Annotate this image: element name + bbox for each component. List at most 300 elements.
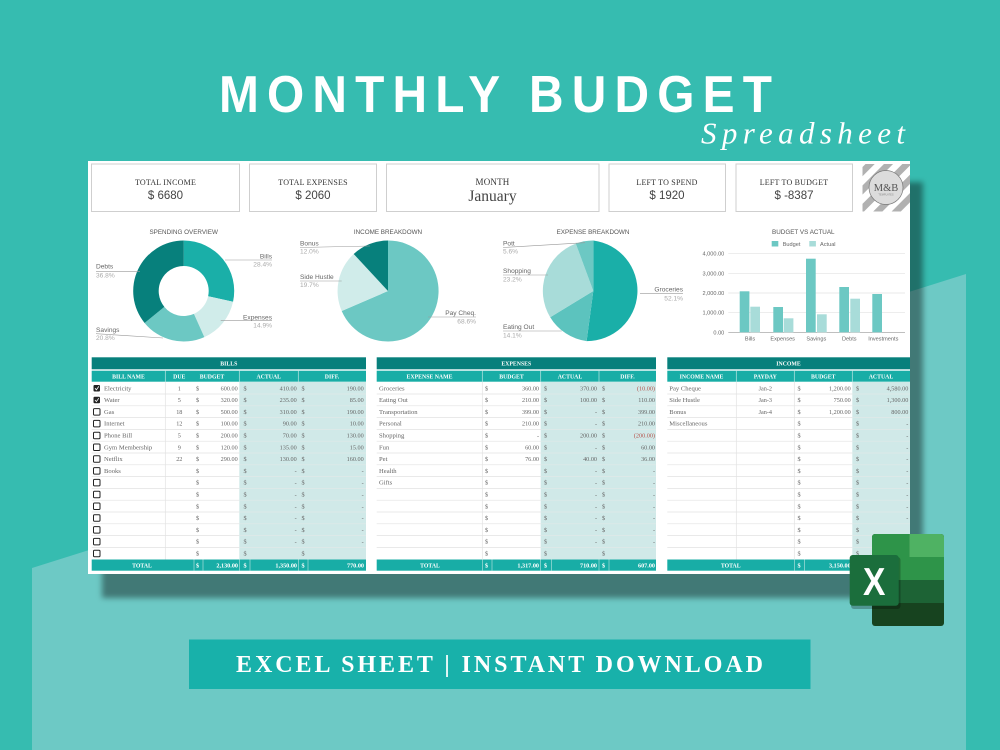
chart: expense breakdown pie: 14.1% — [503, 332, 522, 340]
bills rows: 85.00 — [350, 397, 364, 404]
income rows: $ — [798, 492, 801, 498]
expenses rows: $ — [602, 539, 605, 546]
panel: dashboard sheet — [88, 161, 910, 574]
expenses rows: Shopping — [379, 432, 405, 440]
expenses rows: - — [653, 527, 655, 534]
bills rows: 1 — [178, 385, 181, 392]
bills total row: 2,130.00 — [216, 562, 238, 570]
bills rows: 5 — [178, 397, 181, 404]
income rows: $ — [856, 421, 859, 428]
bills rows: - — [295, 492, 297, 498]
income rows: $ — [856, 456, 859, 463]
bills rows: 190.00 — [347, 385, 364, 392]
bills rows: Gym Membership — [104, 444, 153, 451]
expenses rows: $ — [602, 385, 605, 392]
expenses rows: $ — [485, 550, 488, 558]
bills rows: $ — [244, 397, 247, 404]
chart: budget vs actual bars: Debts — [842, 336, 857, 342]
expenses rows: Transportation — [379, 409, 418, 416]
bills rows: Phone Bill — [104, 432, 132, 440]
income rows: $ — [856, 480, 859, 487]
income rows: 1,300.00 — [887, 397, 908, 404]
expenses rows: $ — [602, 409, 605, 416]
bills rows: 5 — [178, 432, 181, 440]
chart: spending overview donut: 20.8% — [96, 335, 115, 342]
income rows: $ — [798, 503, 801, 510]
income total row: 3,150.00 — [829, 562, 851, 570]
expenses rows: Eating Out — [379, 397, 408, 404]
expenses rows: - — [595, 480, 597, 487]
chart: budget vs actual bars: 2,000.00 — [703, 291, 724, 297]
bills rows: Books — [104, 468, 121, 475]
chart: expense breakdown pie: Groceries — [654, 286, 684, 294]
table: bills — [92, 357, 366, 571]
bills rows: - — [295, 503, 297, 510]
income rows: $ — [798, 539, 801, 546]
income rows: $ — [798, 385, 801, 392]
expenses total row: $ — [544, 562, 547, 570]
bills rows: $ — [196, 468, 199, 475]
chart: income breakdown pie: Side Hustle — [300, 274, 334, 281]
chart: spending overview donut: Bills — [260, 254, 273, 260]
bills rows: $ — [244, 385, 247, 392]
income header: INCOME NAME — [680, 374, 723, 380]
expenses title bar: EXPENSES — [501, 362, 531, 368]
bills rows: $ — [196, 432, 199, 440]
chart: expense breakdown pie: 23.2% — [503, 276, 522, 284]
expenses rows: 76.00 — [525, 456, 539, 463]
income total row: $ — [798, 562, 801, 570]
expenses total row: 1,317.00 — [517, 562, 539, 570]
expenses rows: $ — [485, 421, 488, 428]
expenses rows: $ — [544, 468, 547, 475]
income total row — [667, 560, 910, 571]
bills title bar — [92, 357, 366, 369]
expenses rows: $ — [485, 539, 488, 546]
chart: budget vs actual bars: BUDGET VS ACTUAL — [772, 229, 835, 236]
bills rows: $ — [244, 456, 247, 463]
chart: budget vs actual bars: 3,000.00 — [703, 271, 724, 277]
chart: spending overview donut — [96, 229, 273, 342]
bills rows: Water — [104, 397, 120, 404]
expenses rows: - — [653, 539, 655, 546]
bills rows: $ — [302, 409, 305, 416]
expenses rows: Personal — [379, 421, 402, 428]
expenses rows: $ — [602, 480, 605, 487]
expenses rows: $ — [602, 468, 605, 475]
logo: TEMPLATES — [878, 192, 894, 196]
legend — [772, 241, 836, 248]
income header: BUDGET — [811, 374, 836, 380]
income rows: - — [906, 492, 908, 498]
legend: Budget — [783, 242, 801, 248]
expenses rows: $ — [602, 492, 605, 498]
bills rows: $ — [244, 527, 247, 534]
income rows: $ — [798, 409, 801, 416]
expenses header: BUDGET — [499, 374, 524, 380]
income rows: $ — [856, 503, 859, 510]
bills rows: $ — [302, 515, 305, 522]
income rows: - — [906, 515, 908, 522]
bills rows: $ — [196, 421, 199, 428]
bills rows: 120.00 — [221, 444, 238, 451]
bills rows: $ — [244, 409, 247, 416]
expenses rows: $ — [485, 515, 488, 522]
expenses rows: $ — [544, 539, 547, 546]
KPI: left to budget — [736, 164, 852, 212]
income header: PAYDAY — [754, 374, 778, 380]
bills total row: TOTAL — [132, 564, 152, 570]
income rows: $ — [798, 515, 801, 522]
expenses rows: Fun — [379, 444, 390, 451]
expenses rows: 60.00 — [641, 444, 655, 451]
bills rows: 12 — [176, 421, 182, 428]
expenses rows: $ — [485, 432, 488, 440]
expenses rows: $ — [544, 515, 547, 522]
bills total row: $ — [302, 562, 305, 570]
bills rows: 200.00 — [221, 432, 238, 440]
expenses rows: - — [653, 515, 655, 522]
bills rows: Gas — [104, 409, 115, 416]
chart: spending overview donut: Expenses — [243, 314, 273, 322]
expenses rows: - — [653, 468, 655, 475]
chart: budget vs actual bars: 1,000.00 — [703, 311, 724, 317]
KPI: left to budget: $ -8387 — [774, 190, 814, 202]
expenses rows: 100.00 — [580, 397, 597, 404]
expenses rows: - — [595, 492, 597, 498]
KPI: left to budget: LEFT TO BUDGET — [760, 178, 828, 187]
bills rows: $ — [244, 480, 247, 487]
chart: expense breakdown pie: Pott — [503, 240, 515, 248]
expenses rows: (200.00) — [634, 432, 655, 440]
chart: spending overview donut: Debts — [96, 264, 114, 270]
bills rows: - — [362, 468, 364, 475]
expenses rows: (10.00) — [637, 385, 655, 392]
bills header: ACTUAL — [257, 374, 281, 380]
expenses rows: $ — [602, 432, 605, 440]
income rows: 1,200.00 — [829, 409, 851, 416]
expenses rows: $ — [544, 480, 547, 487]
bills rows: $ — [196, 385, 199, 392]
bills rows: 9 — [178, 444, 181, 451]
expenses rows: - — [595, 468, 597, 475]
expenses rows: $ — [602, 515, 605, 522]
table: income — [667, 357, 910, 571]
expenses rows: $ — [544, 432, 547, 440]
expenses rows: Health — [379, 468, 397, 475]
income rows: $ — [798, 550, 801, 558]
chart: income breakdown pie: INCOME BREAKDOWN — [354, 229, 423, 236]
expenses rows: 60.00 — [525, 444, 539, 451]
expenses rows: 200.00 — [580, 432, 597, 440]
KPI: total expenses: $ 2060 — [295, 190, 331, 202]
bills rows: 18 — [176, 409, 182, 416]
income rows: $ — [798, 421, 801, 428]
bills rows: $ — [196, 527, 199, 534]
chart: income breakdown pie — [300, 229, 476, 341]
expenses rows: $ — [485, 409, 488, 416]
bills total row: 1,350.00 — [275, 562, 297, 570]
chart: budget vs actual bars: Bills — [745, 336, 755, 342]
bills rows: $ — [196, 539, 199, 546]
expenses rows: Pet — [379, 456, 388, 463]
bills rows: $ — [196, 503, 199, 510]
income rows: - — [906, 468, 908, 475]
bills rows: - — [362, 503, 364, 510]
income rows: Side Hustle — [669, 397, 700, 404]
expenses rows: - — [653, 480, 655, 487]
bills rows: $ — [302, 456, 305, 463]
bills rows: 410.00 — [280, 385, 297, 392]
income rows: $ — [798, 527, 801, 534]
income rows: Jan-4 — [759, 409, 772, 416]
bills rows: $ — [244, 550, 247, 558]
chart: spending overview donut: SPENDING OVERVIEW — [149, 229, 218, 236]
bills rows: 310.00 — [280, 409, 297, 416]
expenses rows: 36.00 — [641, 456, 655, 463]
chart: expense breakdown pie: Shopping — [503, 268, 531, 275]
income rows: $ — [798, 456, 801, 463]
income rows: $ — [798, 432, 801, 440]
income rows: - — [906, 421, 908, 428]
expenses total row: 710.00 — [580, 562, 597, 570]
table: expenses — [377, 357, 656, 571]
expenses rows: $ — [544, 444, 547, 451]
expenses rows: 210.00 — [522, 421, 539, 428]
bills rows: $ — [244, 432, 247, 440]
expenses rows: $ — [602, 456, 605, 463]
bills rows: $ — [196, 550, 199, 558]
logo — [862, 164, 910, 212]
income rows: - — [906, 444, 908, 451]
income rows: $ — [856, 444, 859, 451]
expenses rows: 370.00 — [580, 385, 597, 392]
chart: income breakdown pie: 12.0% — [300, 248, 319, 256]
bills rows: - — [295, 480, 297, 487]
bills rows: 320.00 — [221, 397, 238, 404]
bills rows: $ — [244, 539, 247, 546]
bills rows: - — [362, 515, 364, 522]
expenses rows: - — [595, 515, 597, 522]
KPI: month: January — [468, 188, 517, 205]
income rows: 750.00 — [834, 397, 851, 404]
income title bar — [667, 357, 910, 369]
chart: expense breakdown pie — [503, 229, 684, 341]
income rows: Jan-2 — [759, 385, 772, 392]
expenses rows — [379, 385, 655, 558]
bills rows: 135.00 — [280, 444, 297, 451]
bills rows: $ — [302, 492, 305, 498]
expenses header — [377, 371, 656, 382]
expenses total row: TOTAL — [420, 564, 440, 570]
bills rows: $ — [302, 503, 305, 510]
dashboard shadow — [102, 182, 923, 598]
bills rows: 290.00 — [221, 456, 238, 463]
expenses rows: $ — [485, 385, 488, 392]
background light panel — [32, 274, 966, 750]
income rows: $ — [856, 409, 859, 416]
chart: spending overview donut: 14.9% — [253, 322, 272, 330]
bills rows: $ — [302, 539, 305, 546]
bills rows — [104, 385, 364, 558]
bills rows: - — [362, 539, 364, 546]
logo: M&B — [874, 183, 898, 194]
KPI: month: MONTH — [476, 177, 510, 187]
bills rows: - — [295, 515, 297, 522]
bills rows: $ — [302, 480, 305, 487]
income rows: $ — [798, 444, 801, 451]
bills rows: $ — [196, 456, 199, 463]
income rows: $ — [856, 432, 859, 440]
chart: budget vs actual bars: 4,000.00 — [703, 252, 724, 258]
bills total row: 770.00 — [347, 562, 364, 570]
expenses rows: $ — [602, 503, 605, 510]
chart: income breakdown pie: 68.6% — [457, 318, 476, 326]
bills rows: Internet — [104, 421, 125, 428]
bills rows: - — [295, 539, 297, 546]
bills rows: 160.00 — [347, 456, 364, 463]
KPI: total income — [92, 164, 240, 212]
bills rows: - — [295, 527, 297, 534]
expenses rows: 110.00 — [638, 397, 655, 404]
expenses rows: $ — [544, 421, 547, 428]
bills rows: $ — [302, 550, 305, 558]
bills rows: $ — [196, 492, 199, 498]
income rows: $ — [798, 468, 801, 475]
bills header: DUE — [173, 374, 186, 380]
income rows: - — [906, 432, 908, 440]
bills rows: $ — [302, 432, 305, 440]
expenses rows: Groceries — [379, 385, 405, 392]
chart: expense breakdown pie: Eating Out — [503, 324, 534, 331]
chart: budget vs actual bars — [703, 229, 905, 342]
expenses rows: $ — [602, 527, 605, 534]
income header: ACTUAL — [869, 374, 893, 380]
chart: income breakdown pie: Pay Cheq. — [445, 310, 476, 317]
expenses rows: 399.00 — [638, 409, 655, 416]
expenses rows: $ — [544, 456, 547, 463]
expenses total row: $ — [602, 562, 605, 570]
income rows — [669, 385, 908, 558]
chart: budget vs actual bars: Expenses — [770, 336, 795, 342]
income header — [667, 371, 910, 382]
expenses rows: $ — [485, 527, 488, 534]
income title bar: INCOME — [776, 362, 801, 368]
expenses rows: $ — [485, 492, 488, 498]
bills title bar: BILLS — [220, 362, 237, 368]
bills rows: $ — [196, 444, 199, 451]
bills rows: - — [362, 527, 364, 534]
expenses rows: $ — [544, 492, 547, 498]
bills rows: 235.00 — [280, 397, 297, 404]
expenses rows: 360.00 — [522, 385, 539, 392]
bills rows: - — [362, 492, 364, 498]
expenses rows: - — [595, 421, 597, 428]
bills checkboxes — [94, 385, 100, 557]
chart: spending overview donut: 36.8% — [96, 272, 115, 280]
bills rows: 130.00 — [280, 456, 297, 463]
expenses header: DIFF. — [620, 374, 635, 380]
bills total row — [92, 560, 366, 571]
income rows: Pay Cheque — [669, 385, 701, 392]
call to action banner: EXCEL SHEET | INSTANT DOWNLOAD — [236, 652, 763, 678]
expenses rows: $ — [544, 527, 547, 534]
income rows: $ — [856, 515, 859, 522]
bills rows: $ — [302, 421, 305, 428]
bills rows: $ — [244, 468, 247, 475]
KPI: left to spend — [609, 164, 726, 212]
legend: Actual — [820, 242, 836, 248]
bills rows: 10.00 — [350, 421, 364, 428]
bills rows: - — [295, 468, 297, 475]
title: MONTHLY BUDGET — [219, 65, 772, 123]
chart: budget vs actual bars: Investments — [868, 336, 899, 342]
KPI: total income: $ 6680 — [148, 190, 183, 202]
chart: income breakdown pie: 19.7% — [300, 282, 319, 289]
bills rows: $ — [196, 480, 199, 487]
bills rows: $ — [196, 515, 199, 522]
expenses rows: - — [595, 444, 597, 451]
call to action banner — [189, 640, 810, 689]
bills rows: $ — [302, 385, 305, 392]
bills rows: 22 — [176, 456, 182, 463]
expenses rows: 210.00 — [522, 397, 539, 404]
expenses rows: $ — [544, 397, 547, 404]
expenses rows: - — [595, 503, 597, 510]
bills rows: $ — [302, 468, 305, 475]
expenses rows: - — [653, 503, 655, 510]
expenses header: ACTUAL — [558, 374, 582, 380]
bills rows: 100.00 — [221, 421, 238, 428]
bills rows: Netflix — [104, 456, 123, 463]
bills rows: Electricity — [104, 385, 132, 392]
bills total row: $ — [244, 562, 247, 570]
expenses rows: $ — [602, 421, 605, 428]
expenses rows: $ — [602, 444, 605, 451]
income rows: 1,200.00 — [829, 385, 851, 392]
expenses rows: - — [653, 492, 655, 498]
bills rows: 130.00 — [347, 432, 364, 440]
icon: excel logo — [850, 534, 944, 626]
bills rows: 500.00 — [221, 409, 238, 416]
expenses total row — [377, 560, 656, 571]
income rows: $ — [856, 397, 859, 404]
bills rows: 600.00 — [221, 385, 238, 392]
bills rows: $ — [302, 527, 305, 534]
bills rows: $ — [244, 503, 247, 510]
KPI: month — [386, 164, 599, 212]
chart: spending overview donut: 28.4% — [253, 262, 272, 268]
expenses rows: Gifts — [379, 480, 393, 487]
chart: budget vs actual bars: 0.00 — [713, 330, 724, 336]
chart: spending overview donut: Savings — [96, 327, 120, 334]
icon: excel logo: X — [863, 560, 885, 604]
income rows: $ — [856, 385, 859, 392]
bills rows: $ — [302, 444, 305, 451]
bills rows: $ — [244, 515, 247, 522]
expenses rows: 399.00 — [522, 409, 539, 416]
expenses rows: $ — [544, 409, 547, 416]
income rows: - — [906, 480, 908, 487]
income rows: $ — [798, 397, 801, 404]
expenses rows: - — [537, 432, 539, 440]
income rows: Miscellaneous — [669, 421, 708, 428]
bills rows: 70.00 — [283, 432, 297, 440]
income rows: $ — [798, 480, 801, 487]
bills header: BUDGET — [200, 374, 224, 380]
income rows: 800.00 — [891, 409, 908, 416]
expenses rows: $ — [544, 550, 547, 558]
